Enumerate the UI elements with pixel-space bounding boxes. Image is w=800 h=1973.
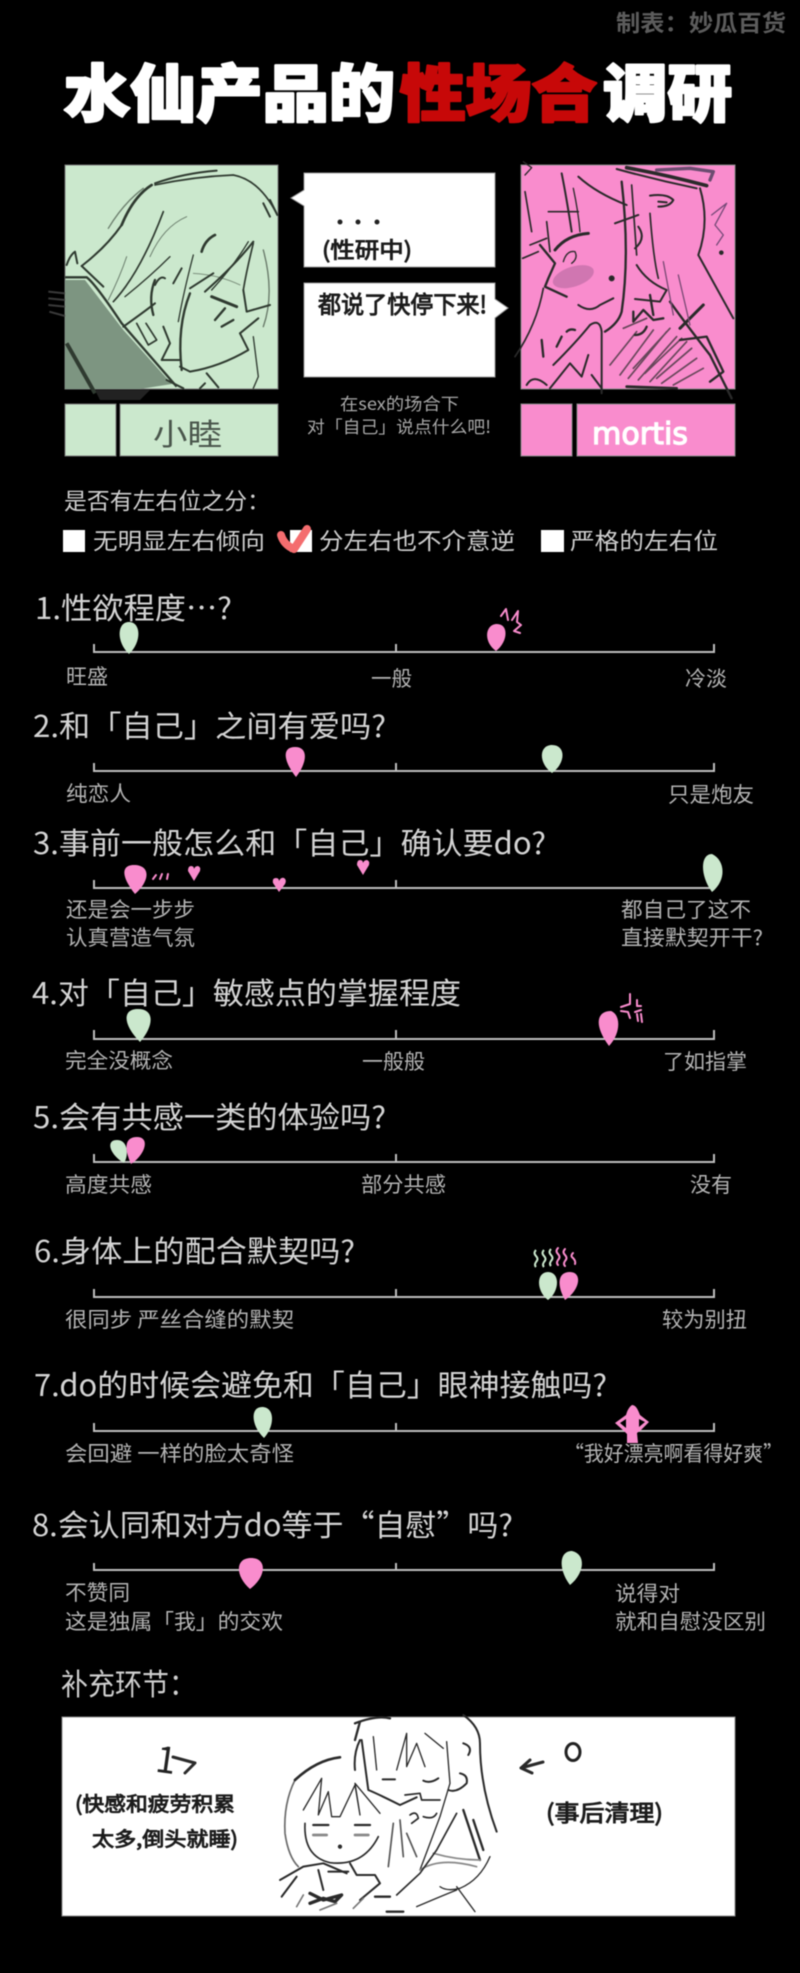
prompt text: 对「自己」说点什么吧!	[307, 413, 491, 438]
question 8	[32, 1501, 766, 1636]
question 6: 很同步 严丝合缝的默契	[65, 1304, 294, 1334]
question 4: 一般般	[362, 1046, 425, 1076]
question 7	[34, 1361, 783, 1468]
blush	[550, 261, 597, 293]
prompt text: 在sex的场合下	[340, 390, 459, 415]
question 5: 高度共感	[65, 1169, 152, 1199]
question 2	[33, 702, 754, 809]
shading hatch	[610, 318, 703, 385]
speech bubble: pink character: 都说了快停下来!	[318, 285, 487, 320]
title	[64, 44, 732, 134]
question 7: “我好漂亮啊看得好爽”	[564, 1438, 783, 1468]
question 4	[32, 969, 747, 1076]
question 1: 旺盛	[66, 661, 108, 691]
question 8: 8.会认同和对方do等于“自慰”吗?	[32, 1501, 513, 1545]
sketch lines	[515, 162, 733, 398]
handwritten note: left	[75, 1788, 238, 1852]
question 5	[33, 1093, 732, 1199]
question 3: 还是会一步步	[66, 894, 195, 924]
name box: pink: mortis	[592, 417, 688, 452]
speech bubble: green character	[291, 173, 495, 267]
speech bubble: green character: (性研中)	[322, 233, 412, 265]
question 1: 冷淡	[685, 663, 727, 693]
speech bubble: pink character	[304, 283, 508, 377]
credit: 制表：妙瓜百货	[616, 4, 786, 38]
score one with arrow	[153, 1731, 195, 1785]
name box: green: 小睦	[153, 410, 222, 454]
name box: green	[65, 404, 278, 456]
question 5: 部分共感	[361, 1169, 446, 1199]
preference question: 是否有左右位之分：	[64, 482, 270, 516]
question 8: 说得对	[615, 1578, 680, 1608]
question 5: 没有	[690, 1169, 732, 1199]
supplementary heading: 补充环节：	[61, 1660, 196, 1704]
handwritten note: left: 太多,倒头就睡)	[92, 1823, 238, 1852]
question 1	[35, 584, 727, 693]
question 6: 6.身体上的配合默契吗?	[34, 1227, 355, 1271]
question 7: 7.do的时候会避免和「自己」眼神接触吗?	[34, 1361, 607, 1405]
question 7: 会回避 一样的脸太奇怪	[65, 1438, 294, 1468]
question 6: 较为别扭	[662, 1304, 747, 1334]
option: no obvious preference: 无明显左右倾向	[93, 522, 265, 556]
panel: supplementary sketch	[62, 1715, 735, 1916]
question 6	[34, 1227, 747, 1334]
question 8: 不赞同	[65, 1577, 130, 1607]
title: 水仙产品的	[64, 44, 395, 134]
panel: pink character portrait	[515, 162, 735, 398]
prompt text	[307, 390, 491, 438]
panel: green character portrait	[48, 165, 278, 400]
question 8: 这是独属「我」的交欢	[65, 1606, 283, 1636]
question 1: 1.性欲程度…?	[35, 584, 232, 628]
question 4: 了如指掌	[663, 1046, 747, 1076]
question 4: 完全没概念	[65, 1045, 173, 1075]
question 8: 就和自慰没区别	[615, 1606, 766, 1636]
handwritten note: right: (事后清理)	[546, 1794, 663, 1828]
title: 调研	[603, 44, 732, 134]
option: strict positions: 严格的左右位	[570, 522, 718, 556]
score zero with arrow	[521, 1744, 580, 1773]
question 3: 都自己了这不	[621, 894, 751, 924]
question 2: 纯恋人	[66, 778, 131, 808]
question 3: 3.事前一般怎么和「自己」确认要do?	[33, 819, 546, 863]
question 3: 直接默契开干?	[621, 922, 763, 952]
score one with arrow: 1	[153, 1731, 180, 1785]
phone held up	[48, 277, 177, 400]
sketch: two embracing figures	[280, 1715, 497, 1912]
question 3: 认真营造气氛	[66, 922, 195, 952]
question 4: 4.对「自己」敏感点的掌握程度	[32, 969, 461, 1013]
name box: pink	[521, 404, 735, 456]
question 2: 只是炮友	[668, 779, 754, 809]
title: 性场合	[400, 44, 597, 134]
question 3	[33, 819, 763, 952]
option: selected with check mark: 分左右也不介意逆	[319, 522, 515, 556]
question 2: 2.和「自己」之间有爱吗?	[33, 702, 386, 746]
handwritten note: left: (快感和疲劳积累	[75, 1788, 235, 1817]
question 5: 5.会有共感一类的体验吗?	[33, 1093, 386, 1137]
question 1: 一般	[371, 663, 412, 693]
sketch lines: hair and face	[67, 171, 277, 388]
